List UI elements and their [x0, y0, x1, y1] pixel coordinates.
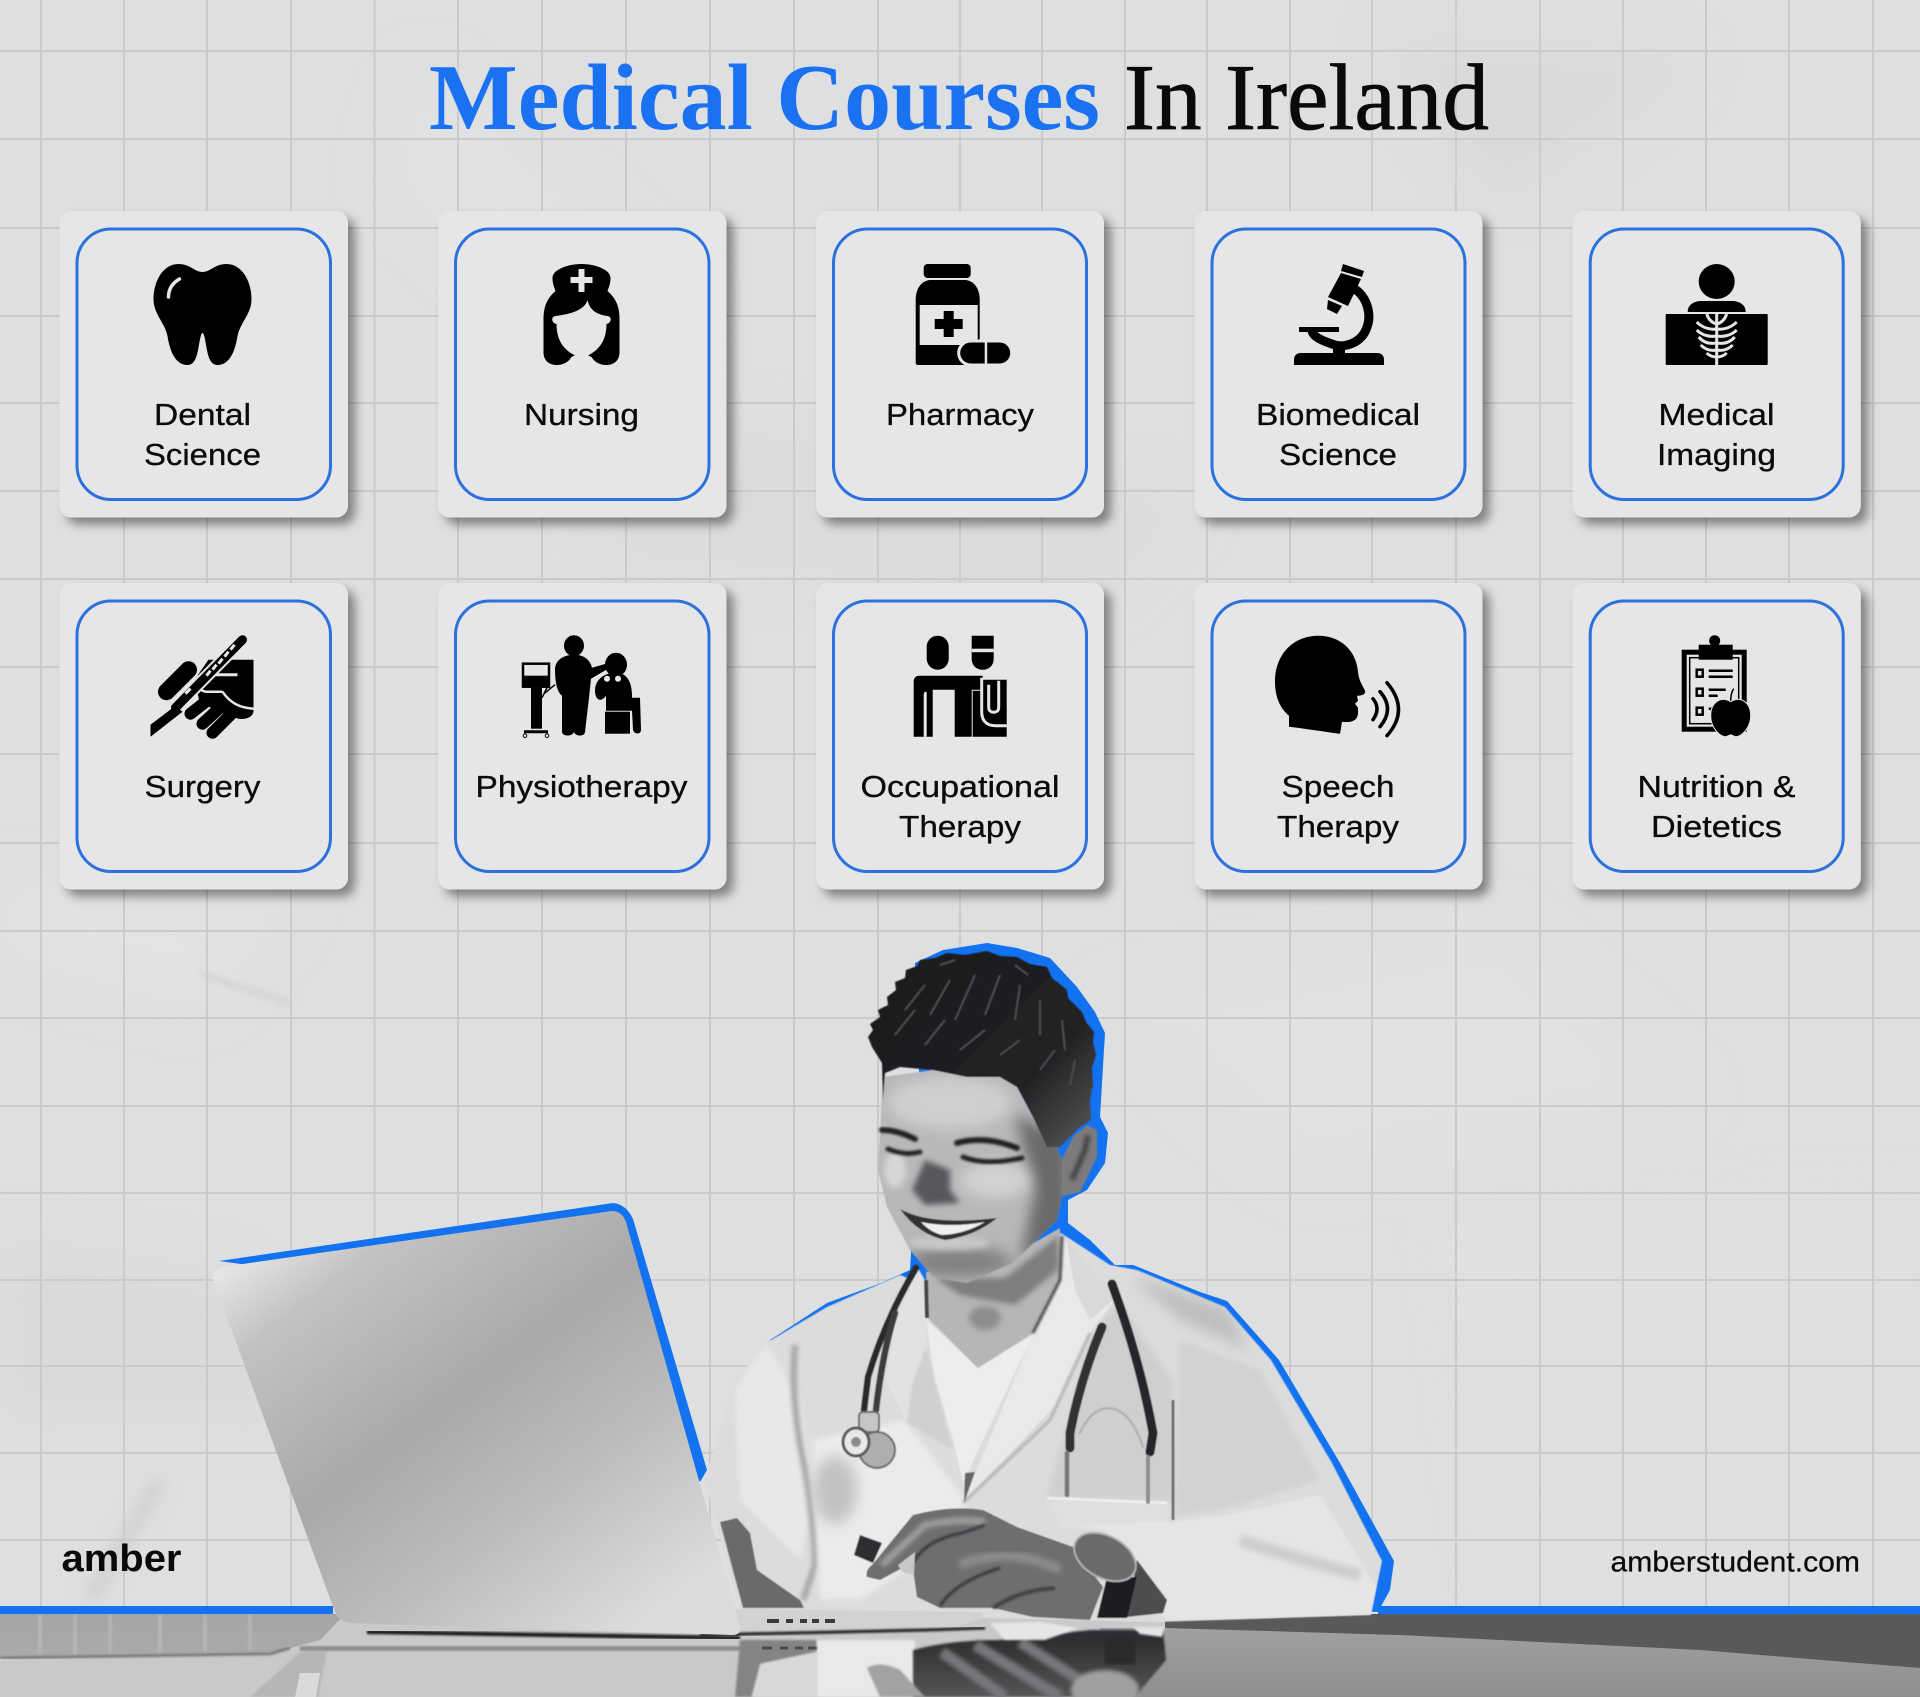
card: Nursing [438, 211, 726, 518]
card: Medical Imaging [1573, 211, 1861, 518]
label: Science [144, 438, 261, 472]
icon: physiotherapy session [523, 635, 641, 738]
laptop shadow line [367, 1632, 740, 1638]
doctor [705, 951, 1382, 1622]
blue base line left [0, 1606, 333, 1614]
laptop blue edge [219, 1203, 707, 1482]
desk [0, 1614, 1920, 1697]
hair [868, 951, 1096, 1147]
smile [900, 1209, 997, 1240]
eyebrows and eyes [882, 1130, 1022, 1162]
label [1657, 398, 1776, 472]
label: Nutrition & [1638, 770, 1796, 804]
label [860, 770, 1060, 844]
label: Therapy [899, 810, 1022, 844]
right hand [867, 1508, 1103, 1620]
footer website: amberstudent.com [1610, 1546, 1860, 1578]
label: Therapy [1277, 810, 1400, 844]
blue base line right [1378, 1606, 1920, 1614]
label: Biomedical [1256, 398, 1420, 432]
label [1277, 770, 1400, 844]
card: Occupational Therapy [816, 583, 1104, 890]
label: Occupational [860, 770, 1060, 804]
label: Medical [1658, 398, 1774, 432]
label [1638, 770, 1796, 844]
icon: tooth [154, 264, 252, 365]
title: In Ireland [1124, 46, 1489, 150]
ear [1058, 1125, 1097, 1197]
card: Nutrition & Dietetics [1573, 583, 1861, 890]
icon: occupational therapist and patient [914, 636, 1007, 737]
card: Pharmacy [816, 211, 1104, 518]
neck [926, 1228, 1062, 1368]
icon: speaking head [1275, 636, 1398, 736]
laptop lid [213, 1211, 740, 1635]
card: Surgery [60, 583, 348, 890]
label: Speech [1282, 770, 1394, 804]
footer logo: amber: amber [62, 1538, 182, 1580]
title [429, 46, 1489, 150]
label: Surgery [144, 770, 261, 804]
t-shirt [926, 1320, 1033, 1483]
card: Speech Therapy [1194, 583, 1482, 890]
collar and lapels [885, 1235, 1117, 1503]
label: Nursing [524, 398, 639, 432]
card: Physiotherapy [438, 583, 726, 890]
icon: microscope [1294, 264, 1384, 365]
label [1256, 398, 1420, 472]
hands and watch [720, 1508, 1167, 1620]
icon: nurse [544, 264, 620, 365]
label: Science [1279, 438, 1397, 472]
coat [705, 1233, 1382, 1622]
card: Biomedical Science [1194, 211, 1482, 518]
laptop base [700, 1609, 985, 1635]
label: Pharmacy [886, 398, 1035, 432]
icon: x-ray [1666, 264, 1768, 365]
highlights under the hand [990, 1622, 1165, 1640]
icon: hand with scalpel [150, 640, 254, 737]
icon: diet clipboard and apple [1682, 635, 1751, 737]
card: Dental Science [60, 211, 348, 518]
stethoscope [843, 1268, 1153, 1502]
label: Physiotherapy [476, 770, 688, 804]
title: Medical Courses [429, 46, 1100, 150]
label [144, 398, 261, 472]
laptop [213, 1203, 1165, 1640]
reflection of hand and watch [867, 1630, 1166, 1697]
doctor cut-out blue outline [770, 943, 1394, 1612]
icon: medicine bottle [916, 264, 1012, 365]
face [878, 1070, 1070, 1283]
label: Dietetics [1651, 810, 1782, 844]
label: Imaging [1657, 438, 1776, 472]
label: Dental [154, 398, 251, 432]
